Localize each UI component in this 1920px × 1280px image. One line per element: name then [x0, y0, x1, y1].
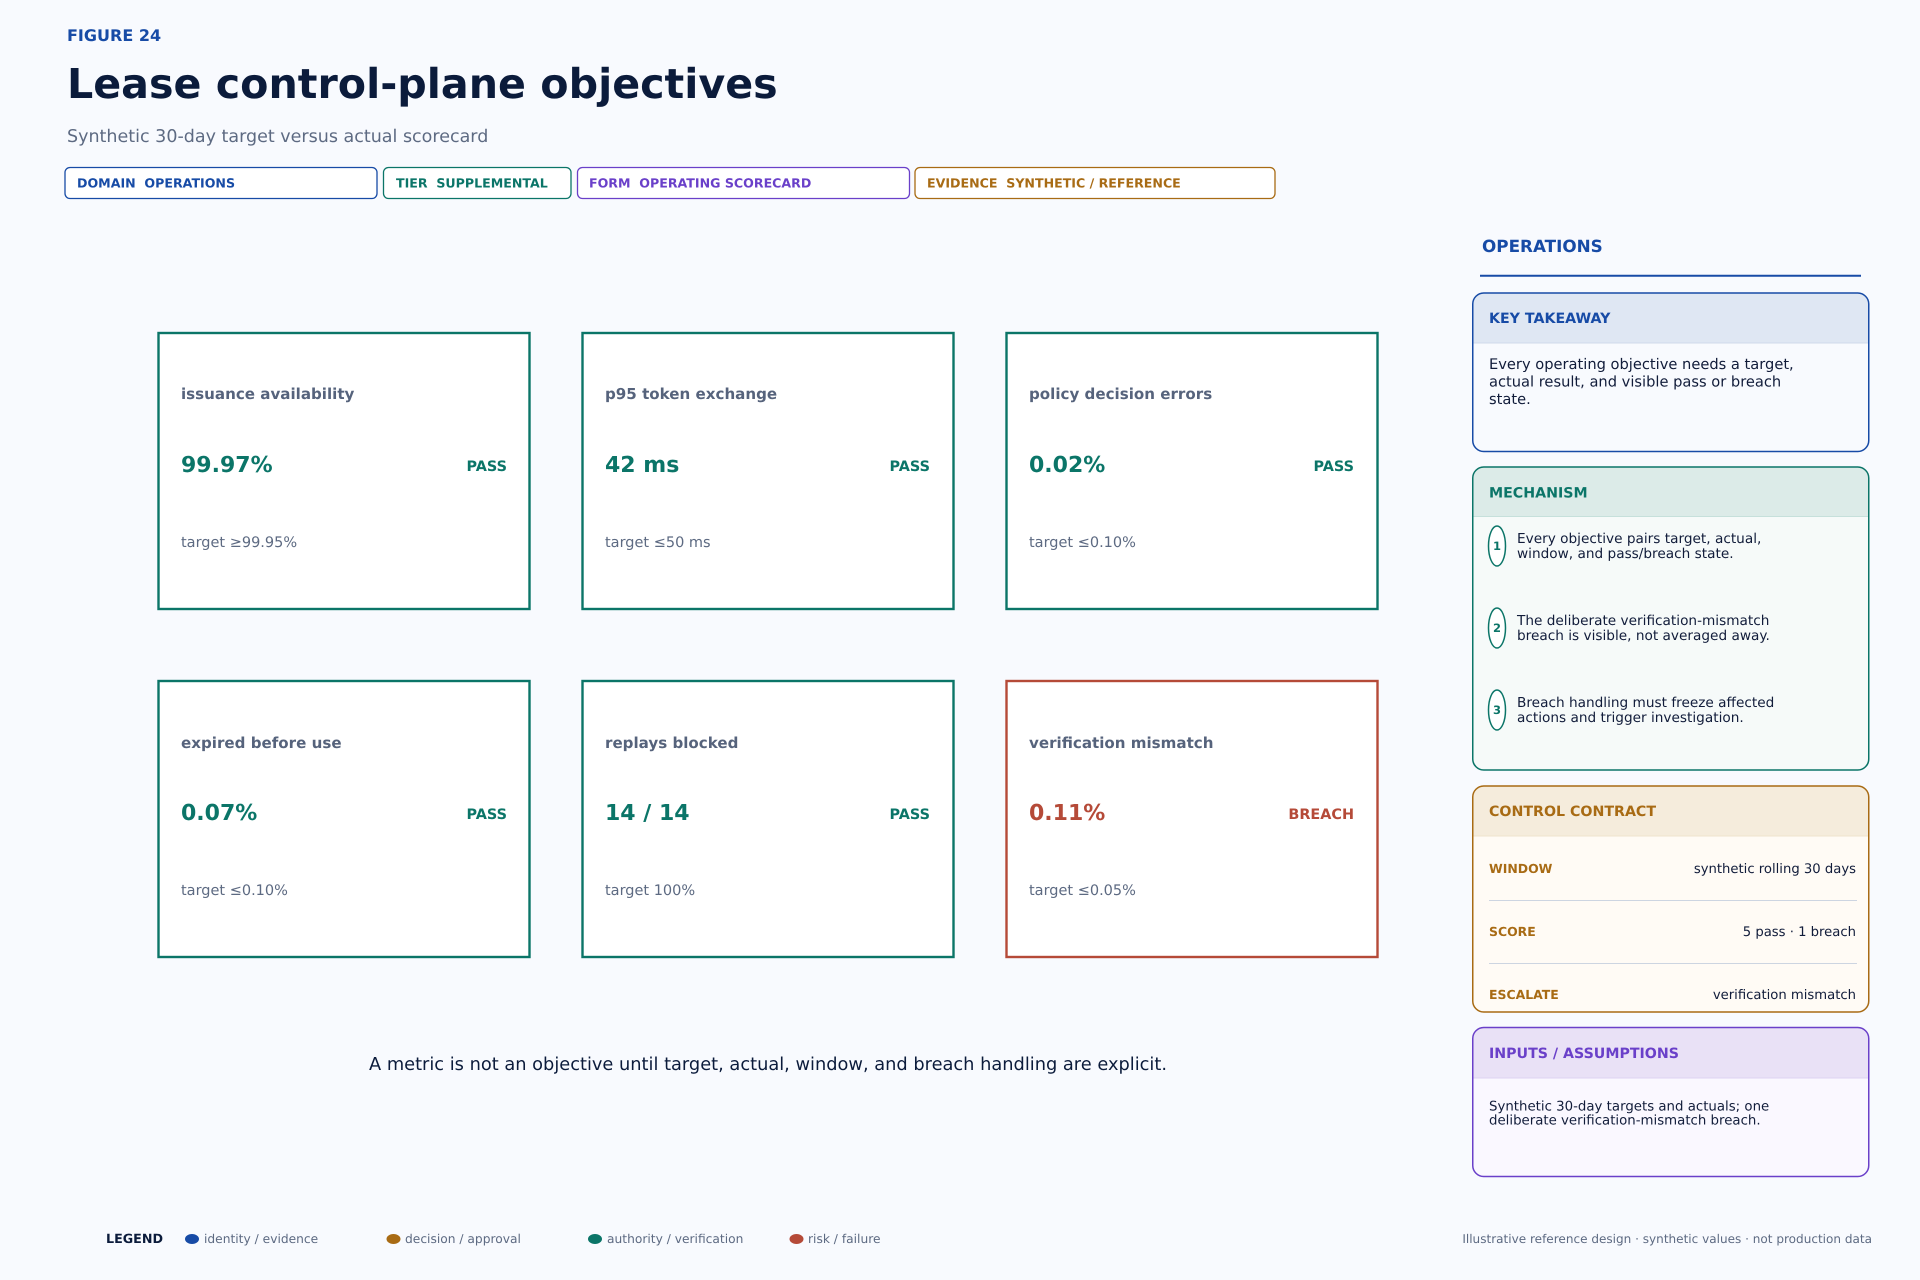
card: p95 token exchange: [582, 333, 954, 609]
pill: tier: [384, 168, 571, 198]
panel: key takeaway: [1473, 293, 1869, 452]
step 1: 1: [1493, 539, 1501, 553]
card: verification mismatch: 0.11%: [1029, 801, 1105, 826]
panel: inputs / assumptions: deliberate verification-mismatch breach.: [1489, 1114, 1761, 1128]
footer note: Illustrative reference design · synthetic values · not production data: [1462, 1232, 1872, 1246]
step 1: Every objective pairs target, actual,: [1517, 531, 1761, 547]
step 3: Breach handling must freeze affected: [1517, 695, 1774, 711]
panel: key takeaway: state.: [1489, 391, 1531, 408]
pill: tier: TIER SUPPLEMENTAL: [396, 176, 548, 190]
card: issuance availability: target ≥99.95%: [181, 535, 297, 551]
card: issuance availability: issuance availability: [181, 385, 355, 403]
step 2: The deliberate verification-mismatch: [1516, 613, 1769, 629]
takeaway note: A metric is not an objective until target, actual, window, and breach handling are explicit.: [369, 1054, 1167, 1075]
card: expired before use: 0.07%: [181, 801, 257, 826]
sidebar heading: OPERATIONS: [1482, 236, 1603, 256]
card: replays blocked: 14 / 14: [605, 801, 690, 826]
step 2: [1488, 608, 1770, 648]
step 2: 2: [1493, 621, 1501, 635]
pill row: [65, 168, 1275, 198]
pill: domain: DOMAIN OPERATIONS: [77, 176, 235, 190]
figure label: FIGURE 24: [67, 26, 161, 45]
pill: evidence: [915, 168, 1275, 198]
step 1: [1488, 526, 1761, 566]
panel: control contract: synthetic rolling 30 days: [1694, 862, 1856, 877]
card: replays blocked: target 100%: [605, 883, 695, 899]
card: p95 token exchange: p95 token exchange: [605, 385, 777, 403]
card: expired before use: expired before use: [181, 734, 342, 752]
card: p95 token exchange: 42 ms: [605, 453, 679, 478]
pill: form: FORM OPERATING SCORECARD: [589, 176, 811, 190]
panel: control contract: SCORE: [1489, 924, 1536, 939]
card: replays blocked: [582, 681, 954, 957]
title: Lease control-plane objectives: [67, 60, 778, 108]
panel: key takeaway: KEY TAKEAWAY: [1489, 311, 1611, 327]
card: verification mismatch: [1006, 681, 1378, 957]
card: expired before use: target ≤0.10%: [181, 883, 288, 899]
step 2: breach is visible, not averaged away.: [1517, 628, 1770, 644]
card: replays blocked: PASS: [890, 807, 930, 823]
panel: mechanism: [1473, 467, 1869, 770]
scorecard grid: [158, 333, 1378, 957]
card: issuance availability: PASS: [467, 459, 507, 475]
pill: form: [578, 168, 910, 198]
panel: inputs / assumptions: INPUTS / ASSUMPTIONS: [1489, 1046, 1679, 1062]
card: expired before use: PASS: [467, 807, 507, 823]
panel: inputs / assumptions: [1473, 1028, 1869, 1176]
card: p95 token exchange: target ≤50 ms: [605, 535, 711, 551]
panel: control contract: 5 pass · 1 breach: [1743, 925, 1856, 940]
subtitle: Synthetic 30-day target versus actual scorecard: [67, 127, 488, 147]
step 3: actions and trigger investigation.: [1517, 710, 1744, 726]
card: p95 token exchange: PASS: [890, 459, 930, 475]
card: policy decision errors: policy decision errors: [1029, 385, 1212, 403]
card: issuance availability: [158, 333, 530, 609]
card: policy decision errors: 0.02%: [1029, 453, 1105, 478]
card: issuance availability: 99.97%: [181, 453, 273, 478]
panel: mechanism: MECHANISM: [1489, 486, 1588, 502]
card: policy decision errors: target ≤0.10%: [1029, 535, 1136, 551]
card: verification mismatch: target ≤0.05%: [1029, 883, 1136, 899]
panel: control contract: [1473, 786, 1869, 1012]
legend: authority: authority / verification: [607, 1232, 743, 1246]
legend: [106, 1231, 881, 1246]
panel: control contract: verification mismatch: [1713, 988, 1856, 1003]
card: expired before use: [158, 681, 530, 957]
pill: evidence: EVIDENCE SYNTHETIC / REFERENCE: [927, 176, 1181, 190]
card: policy decision errors: [1006, 333, 1378, 609]
card: verification mismatch: verification mismatch: [1029, 734, 1213, 752]
card: policy decision errors: PASS: [1314, 459, 1354, 475]
legend: decision: decision / approval: [405, 1232, 521, 1246]
panel: key takeaway: Every operating objective needs a target,: [1489, 356, 1794, 373]
panel: inputs / assumptions: Synthetic 30-day targets and actuals; one: [1489, 1100, 1769, 1114]
panel: control contract: ESCALATE: [1489, 987, 1559, 1002]
panel: key takeaway: actual result, and visible pass or breach: [1489, 374, 1781, 390]
step 1: window, and pass/breach state.: [1517, 546, 1734, 562]
panel: control contract: WINDOW: [1489, 861, 1553, 876]
legend: identity: identity / evidence: [204, 1232, 318, 1246]
step 3: [1488, 690, 1774, 730]
panel: control contract: CONTROL CONTRACT: [1489, 804, 1656, 820]
card: verification mismatch: BREACH: [1288, 807, 1354, 823]
legend: risk: risk / failure: [808, 1232, 881, 1246]
step 3: 3: [1493, 703, 1501, 717]
card: replays blocked: replays blocked: [605, 734, 738, 752]
pill: domain: [65, 168, 377, 198]
legend: LEGEND: [106, 1231, 163, 1246]
